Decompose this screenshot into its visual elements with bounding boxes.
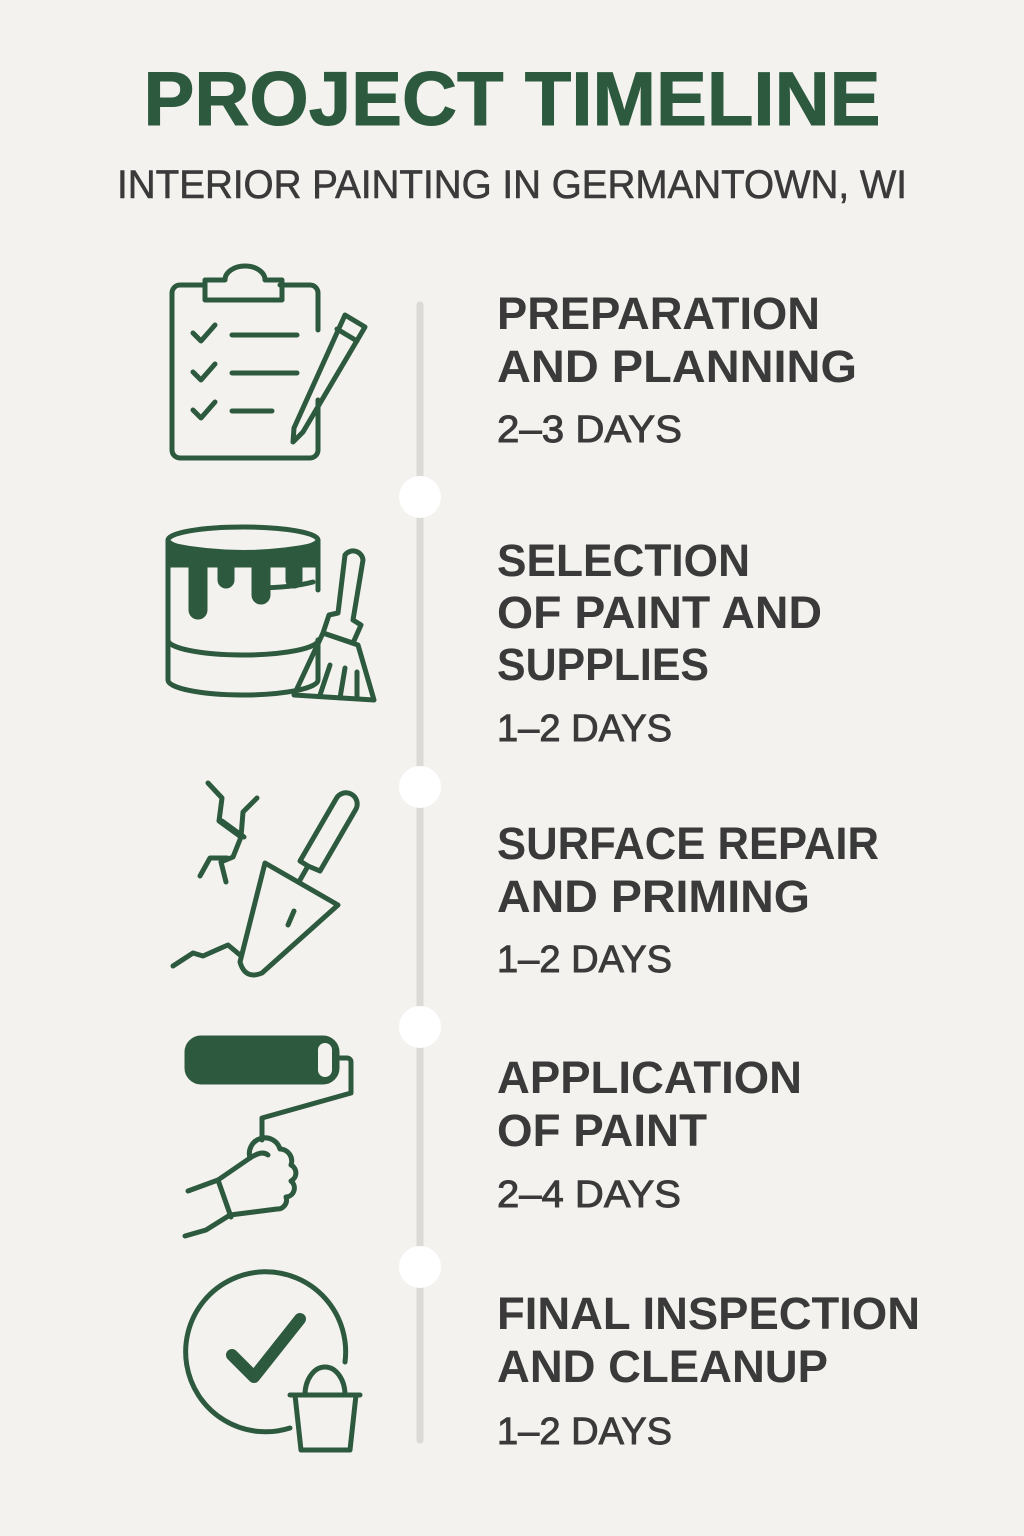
step 5 text: 1–2 DAYS (497, 1411, 672, 1453)
title: PROJECT TIMELINE (144, 57, 880, 142)
icon: clipboard and pencil (172, 266, 365, 458)
step 1 text: 2–3 DAYS (497, 409, 682, 451)
step 4 text: APPLICATION (497, 1052, 802, 1103)
step 2 text (497, 535, 822, 750)
step 1 text (497, 288, 857, 451)
step 5 text (497, 1288, 920, 1453)
step 2 text: 1–2 DAYS (497, 708, 672, 750)
step 1 text: AND PLANNING (497, 341, 857, 392)
step 2 text: OF PAINT AND (497, 587, 822, 638)
step 2 text: SELECTION (497, 535, 750, 586)
step 2 text: SUPPLIES (497, 639, 709, 690)
step 3 text: AND PRIMING (497, 871, 810, 922)
step 3 text: SURFACE REPAIR (497, 818, 879, 869)
step 5 text: AND CLEANUP (497, 1341, 828, 1392)
icon: paint can and brush (168, 527, 374, 700)
step 3 text: 1–2 DAYS (497, 939, 672, 981)
step 1 text: PREPARATION (497, 288, 820, 339)
icon: trowel and cracks (173, 783, 357, 975)
step 3 text (497, 818, 879, 981)
step 5 text: FINAL INSPECTION (497, 1288, 920, 1339)
step 4 text: OF PAINT (497, 1105, 707, 1156)
step 4 text: 2–4 DAYS (497, 1174, 681, 1216)
step 4 text (497, 1052, 802, 1216)
timeline line (399, 305, 441, 1440)
icon: paint roller and hand (185, 1038, 351, 1236)
subtitle: INTERIOR PAINTING IN GERMANTOWN, WI (117, 163, 907, 207)
icon: check circle and bucket (186, 1272, 360, 1450)
